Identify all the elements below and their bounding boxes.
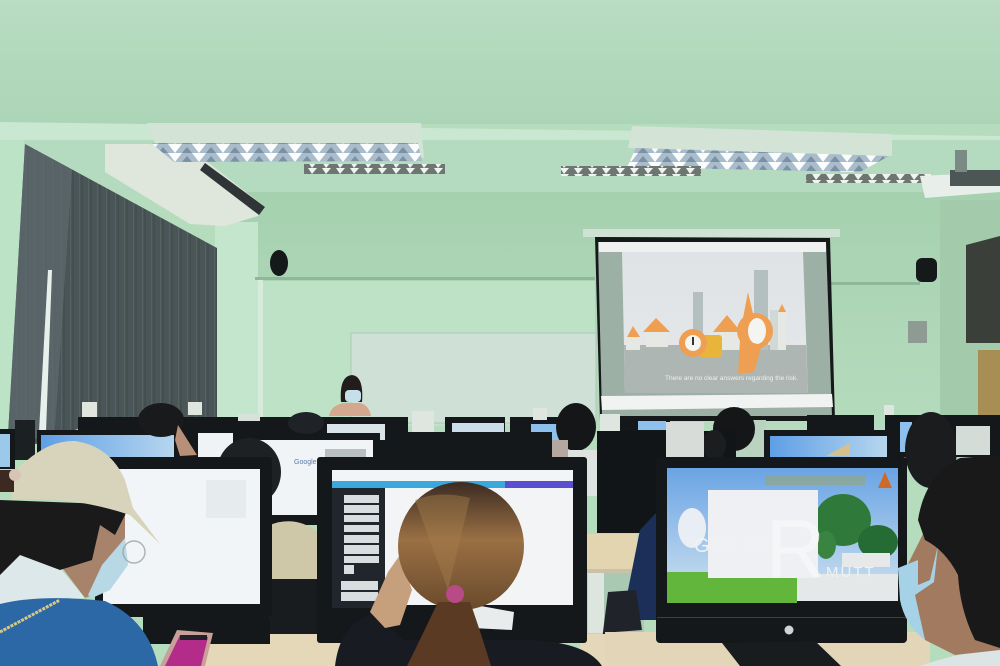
presenter: [329, 375, 371, 416]
ceiling: [0, 0, 1000, 195]
ceiling light right: [561, 126, 931, 183]
back students: [138, 403, 957, 579]
shape palette: [341, 495, 379, 601]
monitor centre: [317, 457, 587, 643]
monitor right HP: [656, 457, 907, 666]
centre black monitor: [597, 430, 736, 533]
desk foreground: [200, 632, 930, 666]
window blinds: [7, 144, 217, 452]
projection screen: [583, 229, 840, 421]
speakers: [270, 250, 937, 282]
ceiling light left: [147, 123, 445, 174]
projector: [920, 150, 1000, 198]
air conditioner: [105, 144, 265, 226]
Google monitor: [233, 433, 380, 525]
right wall panel: [908, 236, 1000, 415]
watermark: GALLE: [694, 535, 773, 557]
monitor right HP: R: [766, 504, 825, 595]
row two monitors: [0, 421, 892, 469]
student left with cap: [0, 441, 160, 666]
desk surface and legs: [270, 513, 656, 640]
screen illustration: [626, 270, 786, 374]
hp logo: [657, 617, 906, 634]
back row monitors and papers: [15, 402, 1000, 460]
monitor left: [95, 457, 272, 644]
phone: [160, 630, 213, 666]
screen caption: There are no clear answers regarding the risk.: [665, 375, 798, 382]
Google label: Google: [294, 459, 317, 466]
monitor right HP: MUTT: [826, 564, 876, 581]
monitor stand: [722, 641, 841, 666]
student centre with ponytail: [335, 482, 602, 666]
back wall: [0, 140, 1000, 440]
student right foreground: [898, 455, 1000, 666]
paper notes: [666, 422, 990, 457]
whiteboard: [351, 333, 596, 423]
